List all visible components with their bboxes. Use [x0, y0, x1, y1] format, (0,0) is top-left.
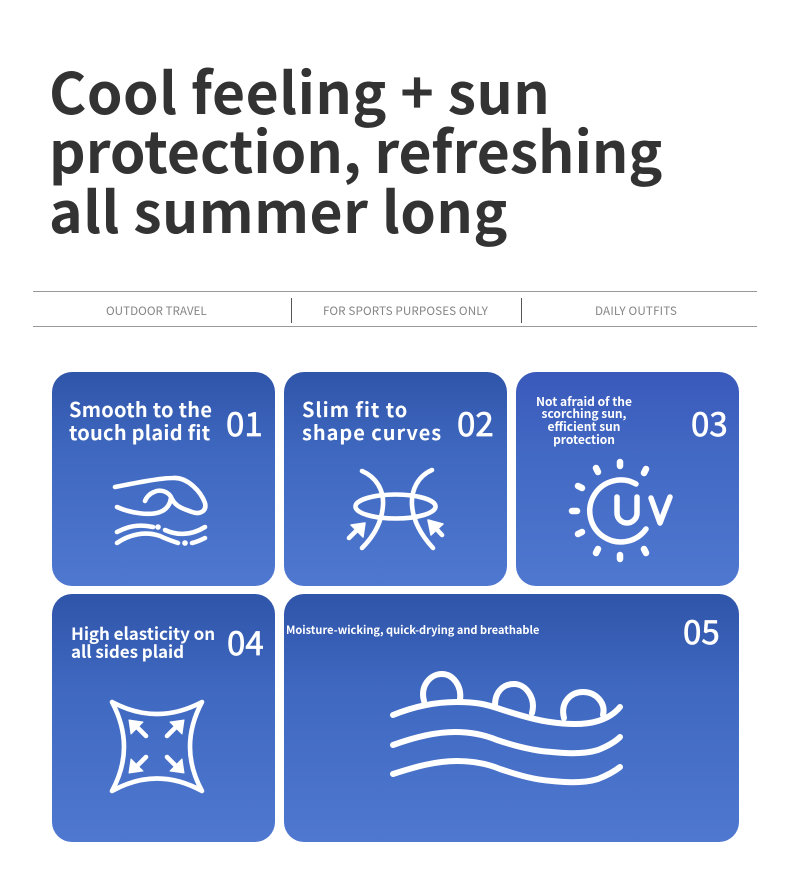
panel: card 05 moisture wicking: 05 [683, 606, 720, 654]
panel: card 05 moisture wicking: Moisture-wicking, quick-drying and breathable [286, 622, 539, 638]
category strip: FOR SPORTS PURPOSES ONLY [323, 302, 488, 319]
panel: card 02 slim fit: 02 [457, 398, 494, 446]
panel: card 01 smooth touch: touch plaid fit [69, 417, 210, 446]
panel: card 03 sun protection: 03 [691, 398, 728, 446]
panel: card 03 sun protection: Not afraid of the [536, 392, 632, 410]
panel: card 04 elasticity [52, 594, 275, 842]
panel: card 01 smooth touch: 01 [226, 398, 263, 446]
panel: card 03 sun protection: scorching sun, [542, 405, 626, 422]
category strip [33, 291, 757, 327]
title: all summer long [49, 168, 508, 250]
category strip: DAILY OUTFITS [595, 302, 677, 319]
panel: card 04 elasticity: 04 [227, 617, 264, 665]
panel: card 05 moisture wicking [284, 594, 739, 842]
panel: card 01 smooth touch: Smooth to the [69, 394, 212, 423]
title: Cool feeling + sun [49, 49, 550, 131]
panel: card 04 elasticity: High elasticity on [71, 620, 215, 645]
panel: card 03 sun protection [516, 372, 739, 586]
panel: card 04 elasticity: all sides plaid [71, 638, 184, 662]
panel: card 02 slim fit: shape curves [302, 417, 442, 446]
category strip: OUTDOOR TRAVEL [106, 302, 207, 319]
panel: card 01 smooth touch [52, 372, 275, 586]
panel: card 02 slim fit [284, 372, 507, 586]
title [49, 49, 662, 250]
panel: card 02 slim fit: Slim fit to [302, 394, 408, 423]
panel: card 03 sun protection: efficient sun [548, 418, 620, 435]
panel: card 03 sun protection: protection [553, 431, 615, 448]
title: protection, refreshing [49, 108, 662, 190]
